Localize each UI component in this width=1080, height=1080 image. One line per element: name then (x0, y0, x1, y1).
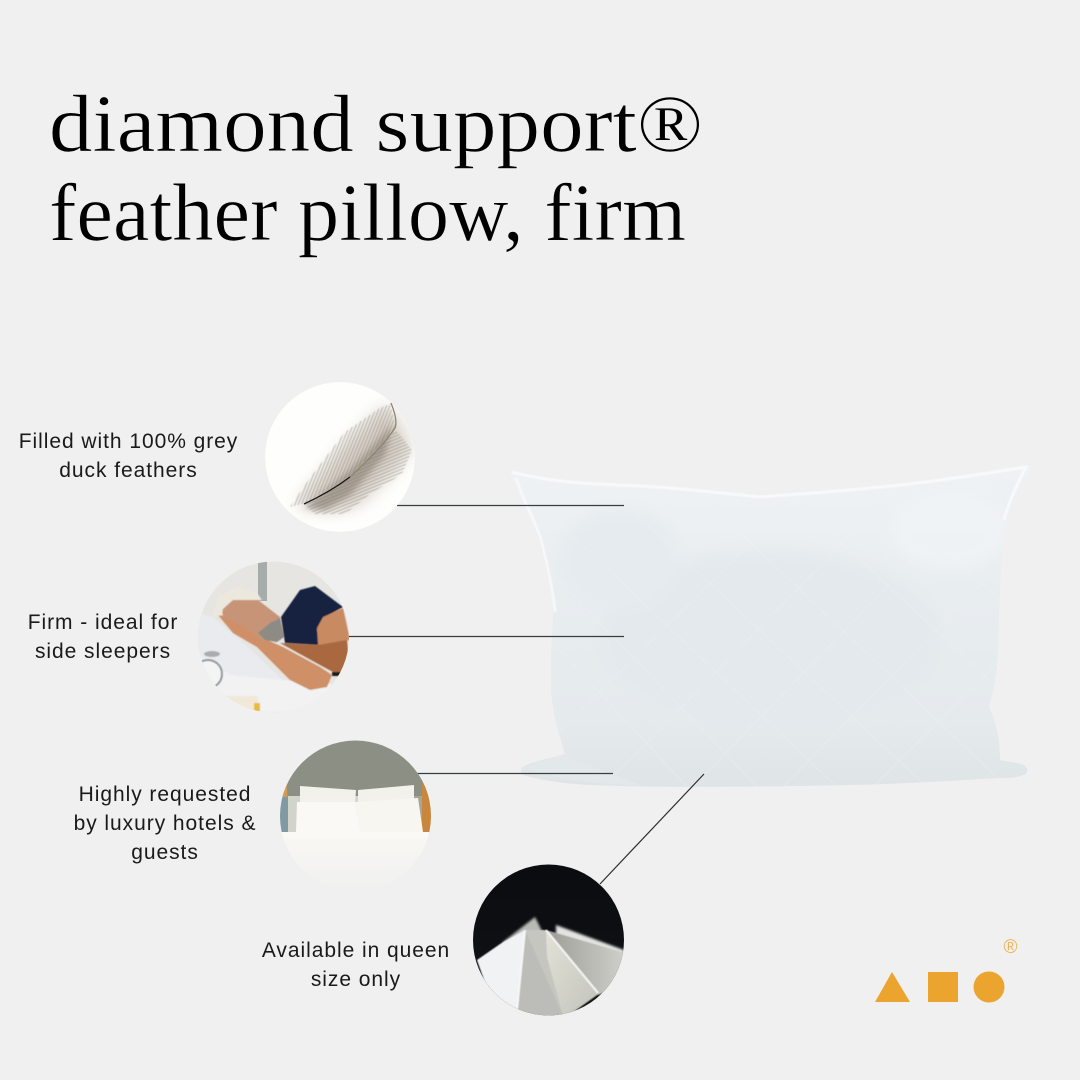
infographic canvas (20, 94, 1028, 1016)
label: firmness (28, 611, 178, 663)
middle fold (518, 935, 562, 1016)
sleeping man photo circle (194, 561, 350, 713)
logo (875, 937, 1018, 1002)
label: feathers (19, 430, 238, 482)
title (49, 78, 703, 258)
left pillow (477, 930, 525, 1012)
right front fold (546, 932, 583, 1009)
label: hotels: guests (131, 841, 199, 864)
upper arm (317, 608, 350, 645)
logo square (928, 972, 958, 1002)
label: queen size (262, 939, 450, 991)
label: firmness: Firm - ideal for (28, 611, 178, 634)
logo circle (974, 972, 1004, 1002)
lower arm (280, 640, 350, 672)
pillows back row (300, 786, 356, 802)
label: queen size: Available in queen (262, 939, 450, 962)
logo registered mark: ® (1004, 937, 1018, 958)
label: hotels: by luxury hotels & (74, 812, 256, 835)
logo triangle (875, 972, 910, 1002)
back peak (502, 916, 544, 942)
right rear pillow (546, 930, 624, 995)
feather shaft (350, 403, 396, 477)
connector line: queen size (600, 774, 704, 884)
label: queen size: size only (311, 968, 401, 991)
title: diamond support® (49, 78, 703, 169)
face (222, 600, 284, 642)
folded pillows photo circle (473, 864, 625, 1018)
pillows front row (296, 802, 361, 832)
label: feathers: Filled with 100% grey (19, 430, 238, 453)
pillow (228, 630, 250, 650)
alarm clock (202, 658, 224, 686)
hair (218, 594, 262, 616)
title: feather pillow, firm (49, 167, 686, 258)
forearm (218, 615, 332, 690)
pillow photo (500, 465, 1031, 790)
label: feathers: duck feathers (59, 459, 198, 482)
connector line: feathers (397, 504, 624, 506)
beard (258, 618, 284, 642)
fold base filling the gap between folds (526, 929, 598, 1016)
feather photo circle (265, 382, 415, 532)
label: hotels (74, 783, 256, 864)
connector line: firmness (349, 636, 624, 638)
label: hotels: Highly requested (79, 783, 251, 806)
mattress (288, 832, 430, 834)
shirt (281, 586, 343, 645)
feather barbs (290, 404, 412, 514)
hotel bed photo circle (280, 740, 431, 838)
bedding (201, 657, 332, 712)
connector line: hotels (416, 772, 613, 774)
label: firmness: side sleepers (35, 640, 171, 663)
